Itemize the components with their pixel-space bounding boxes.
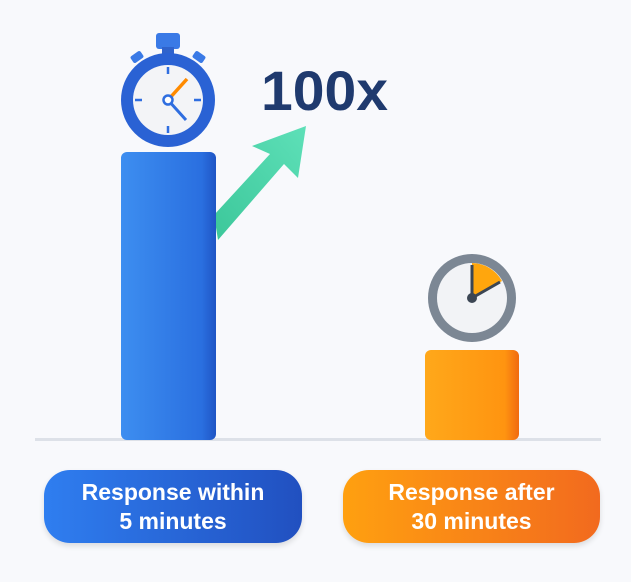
label: response after 30 minutes: 30 minutes bbox=[411, 508, 532, 534]
bar: blue bbox=[121, 152, 216, 440]
icon: stopwatch bbox=[121, 33, 215, 147]
chart bbox=[35, 33, 601, 441]
icon: clock bbox=[428, 254, 516, 342]
label: response after 30 minutes bbox=[343, 470, 600, 543]
bar: orange bbox=[425, 350, 519, 440]
label: response after 30 minutes: Response after bbox=[388, 478, 555, 504]
arrow: growth bbox=[214, 126, 306, 240]
label: response within 5 minutes: Response within bbox=[82, 478, 264, 504]
label: response within 5 minutes bbox=[44, 470, 302, 543]
text: 100x: 100x bbox=[261, 59, 388, 122]
label: response within 5 minutes: 5 minutes bbox=[119, 508, 227, 534]
baseline bbox=[35, 438, 601, 441]
